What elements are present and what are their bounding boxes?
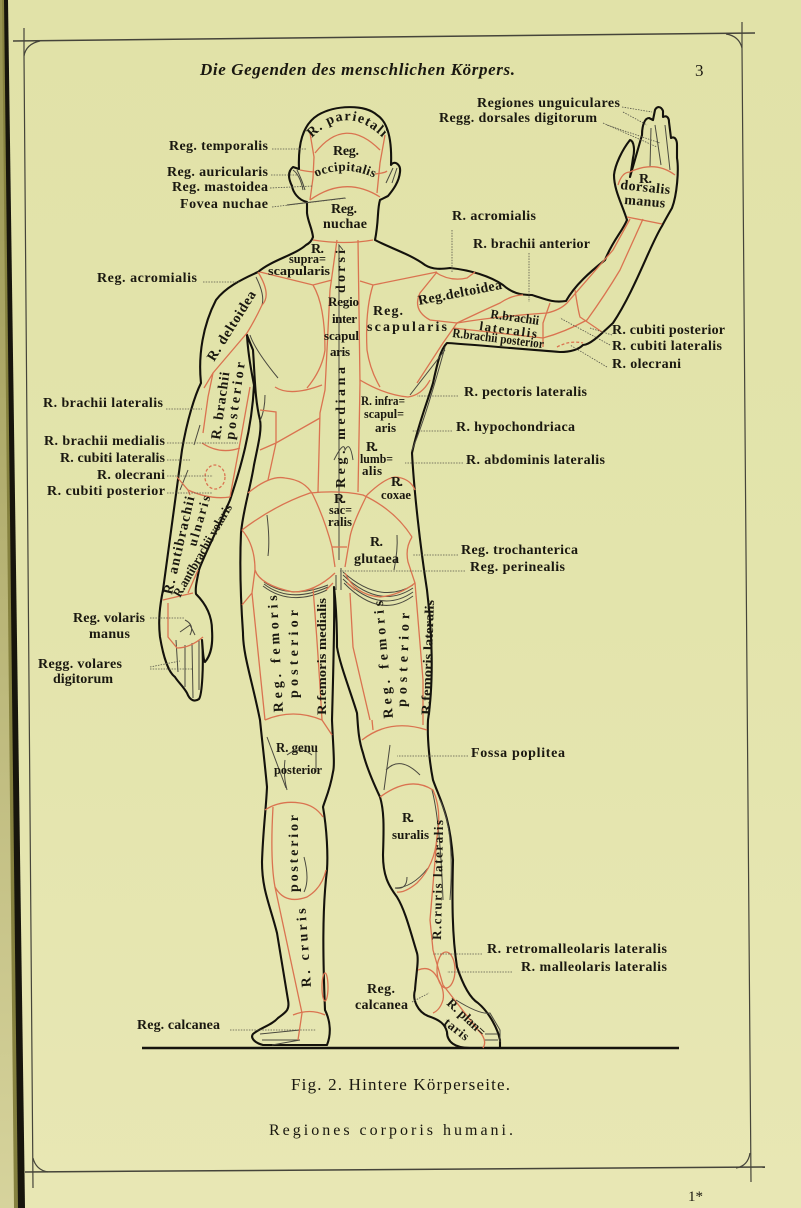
labels: arms: R. brachii anterior — [473, 237, 590, 252]
labels: lower legs: posterior — [274, 762, 322, 777]
labels: arms: Reg. volaris — [73, 611, 146, 626]
labels: lower legs: taris — [441, 1015, 472, 1044]
labels: trunk sides — [328, 385, 606, 575]
figure caption: Fig. 2. Hintere Körperseite. — [291, 1075, 510, 1094]
labels: trunk sides: Reg. trochanterica — [461, 543, 578, 558]
signature mark: 1* — [688, 1189, 703, 1205]
labels: upper back: R. deltoidea — [205, 288, 260, 364]
labels: upper back: Reg. — [373, 304, 403, 319]
labels: upper back: Reg. mediana — [334, 367, 349, 488]
labels: arms: ulnaris — [184, 494, 213, 548]
labels: arms: Regg. dorsales digitorum — [439, 111, 597, 126]
labels: upper back: R. — [366, 440, 378, 455]
labels: trunk sides: sac= — [329, 502, 352, 517]
labels: arms: R. brachii lateralis — [43, 396, 164, 411]
labels: head and neck: Reg. — [331, 202, 357, 217]
labels: trunk sides: R. hypochondriaca — [456, 420, 575, 435]
labels: trunk sides: glutaea — [354, 552, 399, 567]
plate title: Regiones corporis humani. — [269, 1122, 513, 1139]
labels: upper back: aris — [375, 420, 396, 435]
labels: arms: R. olecrani — [97, 468, 165, 483]
labels: arms: lateralis — [479, 318, 538, 341]
labels: lower legs: R. plan= — [444, 995, 489, 1039]
labels: upper back: supra= — [289, 251, 326, 266]
labels: lower legs: R. cruris — [294, 907, 315, 988]
labels: thighs: posterior — [287, 610, 302, 698]
labels: arms: R. cubiti posterior — [612, 323, 725, 338]
labels: upper back: scapul — [324, 328, 359, 343]
labels: arms: R. — [639, 172, 652, 187]
labels: head and neck — [167, 111, 387, 232]
labels: lower legs: R. genu — [276, 741, 318, 756]
labels: thighs: posterior — [395, 613, 413, 707]
labels: upper back: dorsi — [334, 250, 349, 293]
labels: upper back: R. infra= — [361, 393, 405, 408]
labels: upper back: aris — [330, 344, 350, 359]
labels: arms: R. cubiti lateralis — [612, 339, 723, 354]
labels: lower legs: calcanea — [355, 998, 408, 1013]
figure: human body from behind — [142, 107, 679, 1048]
page number: 3 — [695, 61, 704, 80]
labels: upper back: inter — [332, 311, 357, 326]
labels: thighs: Reg. femoris — [372, 600, 397, 719]
labels: thighs: Reg. femoris — [266, 594, 287, 713]
labels: lower legs: suralis — [392, 827, 429, 842]
labels: arms: manus — [624, 193, 666, 212]
labels: head and neck: Reg. — [333, 144, 359, 159]
ground line — [142, 1047, 679, 1049]
labels: lower legs: Reg. — [367, 982, 395, 997]
body outline — [159, 107, 678, 1048]
labels: arms: Regg. volares — [38, 657, 123, 672]
labels: thighs — [266, 594, 437, 719]
labels: upper back: scapularis — [268, 263, 330, 278]
body shading — [176, 125, 670, 1045]
labels: arms: R. antibrachii — [161, 495, 198, 596]
labels: trunk sides: R. pectoris lateralis — [464, 385, 588, 400]
labels: arms: R. brachii — [209, 371, 233, 441]
labels: arms: posterior — [223, 361, 249, 441]
labels: head and neck: Fovea nuchae — [180, 197, 268, 212]
labels: arms: Reg.deltoidea — [417, 278, 503, 309]
labels: lower legs: Reg. calcanea — [137, 1018, 220, 1033]
labels: lower legs: R.cruris lateralis — [429, 820, 446, 940]
labels: arms: Reg. acromialis — [97, 271, 198, 286]
labels: head and neck: occipitalis — [315, 162, 376, 177]
labels: upper back: lumb= — [360, 451, 393, 466]
labels: arms: R. cubiti lateralis — [60, 451, 166, 466]
regional boundary lines — [163, 133, 675, 1048]
labels: lower legs — [137, 741, 668, 1044]
labels: arms: manus — [89, 627, 131, 642]
running title: Die Gegenden des menschlichen Körpers. — [199, 60, 515, 79]
labels: arms: R. brachii medialis — [44, 434, 166, 449]
labels: upper back: scapularis — [367, 320, 448, 335]
labels: lower legs: R. malleolaris lateralis — [521, 960, 668, 975]
labels: upper back: Regio — [328, 294, 359, 309]
labels: upper back — [205, 242, 448, 488]
labels: arms: R.antibrachii volaris — [170, 501, 235, 600]
labels: arms: Regiones unguiculares — [477, 96, 621, 111]
labels: upper back: scapul= — [364, 406, 404, 421]
labels: trunk sides: ralis — [328, 514, 352, 529]
book gutter — [0, 0, 25, 1208]
labels: arms: R. olecrani — [612, 357, 681, 372]
labels: lower legs: R. retromalleolaris lateralis — [487, 942, 668, 957]
labels: thighs: R.femoris lateralis — [418, 600, 437, 715]
labels: thighs: R.femoris medialis — [314, 598, 329, 715]
labels: arms: R. cubiti posterior — [47, 484, 165, 499]
labels: head and neck: Reg. auricularis — [167, 165, 269, 180]
labels: arms: dorsalis — [620, 178, 671, 198]
labels: trunk sides: coxae — [381, 487, 411, 502]
labels: trunk sides: R. — [370, 535, 383, 550]
labels: lower legs: R. — [402, 811, 414, 826]
labels: trunk sides: R. abdominis lateralis — [466, 453, 606, 468]
labels: arms: R.brachii posterior — [452, 325, 545, 351]
labels: head and neck: Reg. temporalis — [169, 139, 269, 154]
labels: trunk sides: R. — [334, 492, 346, 507]
labels: arms: R. acromialis — [452, 209, 537, 224]
labels: arms: R.brachii — [490, 306, 541, 328]
labels: upper back: R. — [311, 242, 324, 257]
labels: arms — [38, 96, 725, 687]
labels: upper back: alis — [362, 463, 382, 478]
labels: trunk sides: R. — [391, 475, 403, 490]
labels: trunk sides: Reg. perinealis — [470, 560, 566, 575]
labels: lower legs: posterior — [287, 815, 302, 892]
leader lines — [150, 107, 660, 1030]
labels: lower legs: Fossa poplitea — [471, 746, 565, 761]
labels: arms: digitorum — [53, 672, 113, 687]
labels: head and neck: Reg. mastoidea — [172, 180, 268, 195]
labels: head and neck: nuchae — [323, 217, 367, 232]
